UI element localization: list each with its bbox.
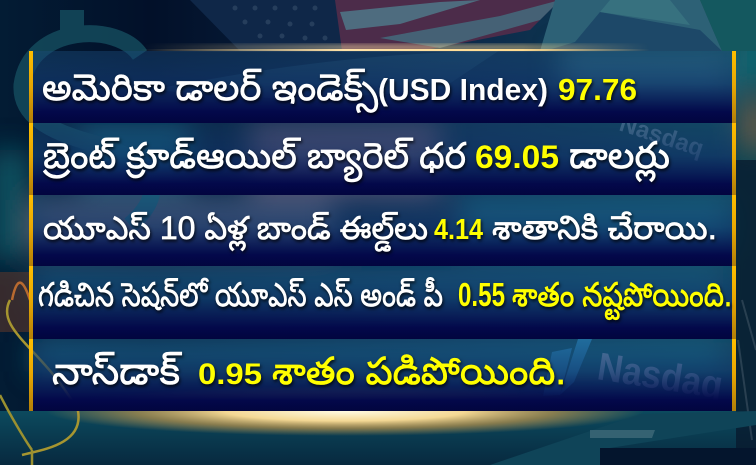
top glow line xyxy=(140,44,650,51)
background: stock exchange building xyxy=(540,0,756,51)
row 4: S&P 500: గడిచిన సెషన్‌లో యూఎస్ ఎస్ అండ్ పీ xyxy=(38,276,443,313)
panel: row fills xyxy=(33,51,732,411)
background: skyline bottom right xyxy=(490,411,756,465)
row 5: Nasdaq: శాతం పడిపోయింది. xyxy=(272,351,566,393)
row 4: S&P 500 xyxy=(38,276,732,320)
row 1: USD index: అమెరికా డాలర్ ఇండెక్స్ xyxy=(42,67,378,113)
Nasdaq logo and wordmark behind row 5 xyxy=(543,339,726,408)
background: US flag xyxy=(150,0,560,100)
row 4: S&P 500: 0.55 xyxy=(458,276,505,313)
row 5: Nasdaq: 0.95 xyxy=(198,358,262,391)
faint Nasdaq in row 2: Nasdaq xyxy=(616,110,707,162)
row 3: 10-year bond yield xyxy=(43,209,717,252)
row 1: USD index xyxy=(42,67,637,113)
row 2: Brent crude xyxy=(43,135,670,182)
row 2: Brent crude: డాలర్లు xyxy=(569,135,670,182)
bottom glow xyxy=(45,386,645,436)
row 1: USD index: (USD Index) xyxy=(378,72,548,107)
background: coin outline bottom left xyxy=(0,283,79,465)
row 2: Brent crude: 69.05 xyxy=(475,139,559,175)
row 3: 10-year bond yield: శాతానికి చేరాయి. xyxy=(492,209,717,246)
row 1: USD index: 97.76 xyxy=(558,72,637,107)
row 2: Brent crude: బ్రెంట్ క్రూడ్‌ఆయిల్ బ్యారెల్ ధర xyxy=(43,135,467,182)
row 3: 10-year bond yield: 4.14 xyxy=(434,214,483,246)
icon: dollar sign left xyxy=(22,10,152,225)
Nasdaq logo and wordmark behind row 5: Nasdaq xyxy=(595,345,726,408)
gold side bars xyxy=(29,51,736,411)
row 5: Nasdaq: నాస్‌డాక్ xyxy=(52,351,182,393)
row 3: 10-year bond yield: యూఎస్ 10 ఏళ్ల బాండ్ ఈల్డ్‌లు xyxy=(43,210,428,252)
row 5: Nasdaq xyxy=(52,351,566,393)
